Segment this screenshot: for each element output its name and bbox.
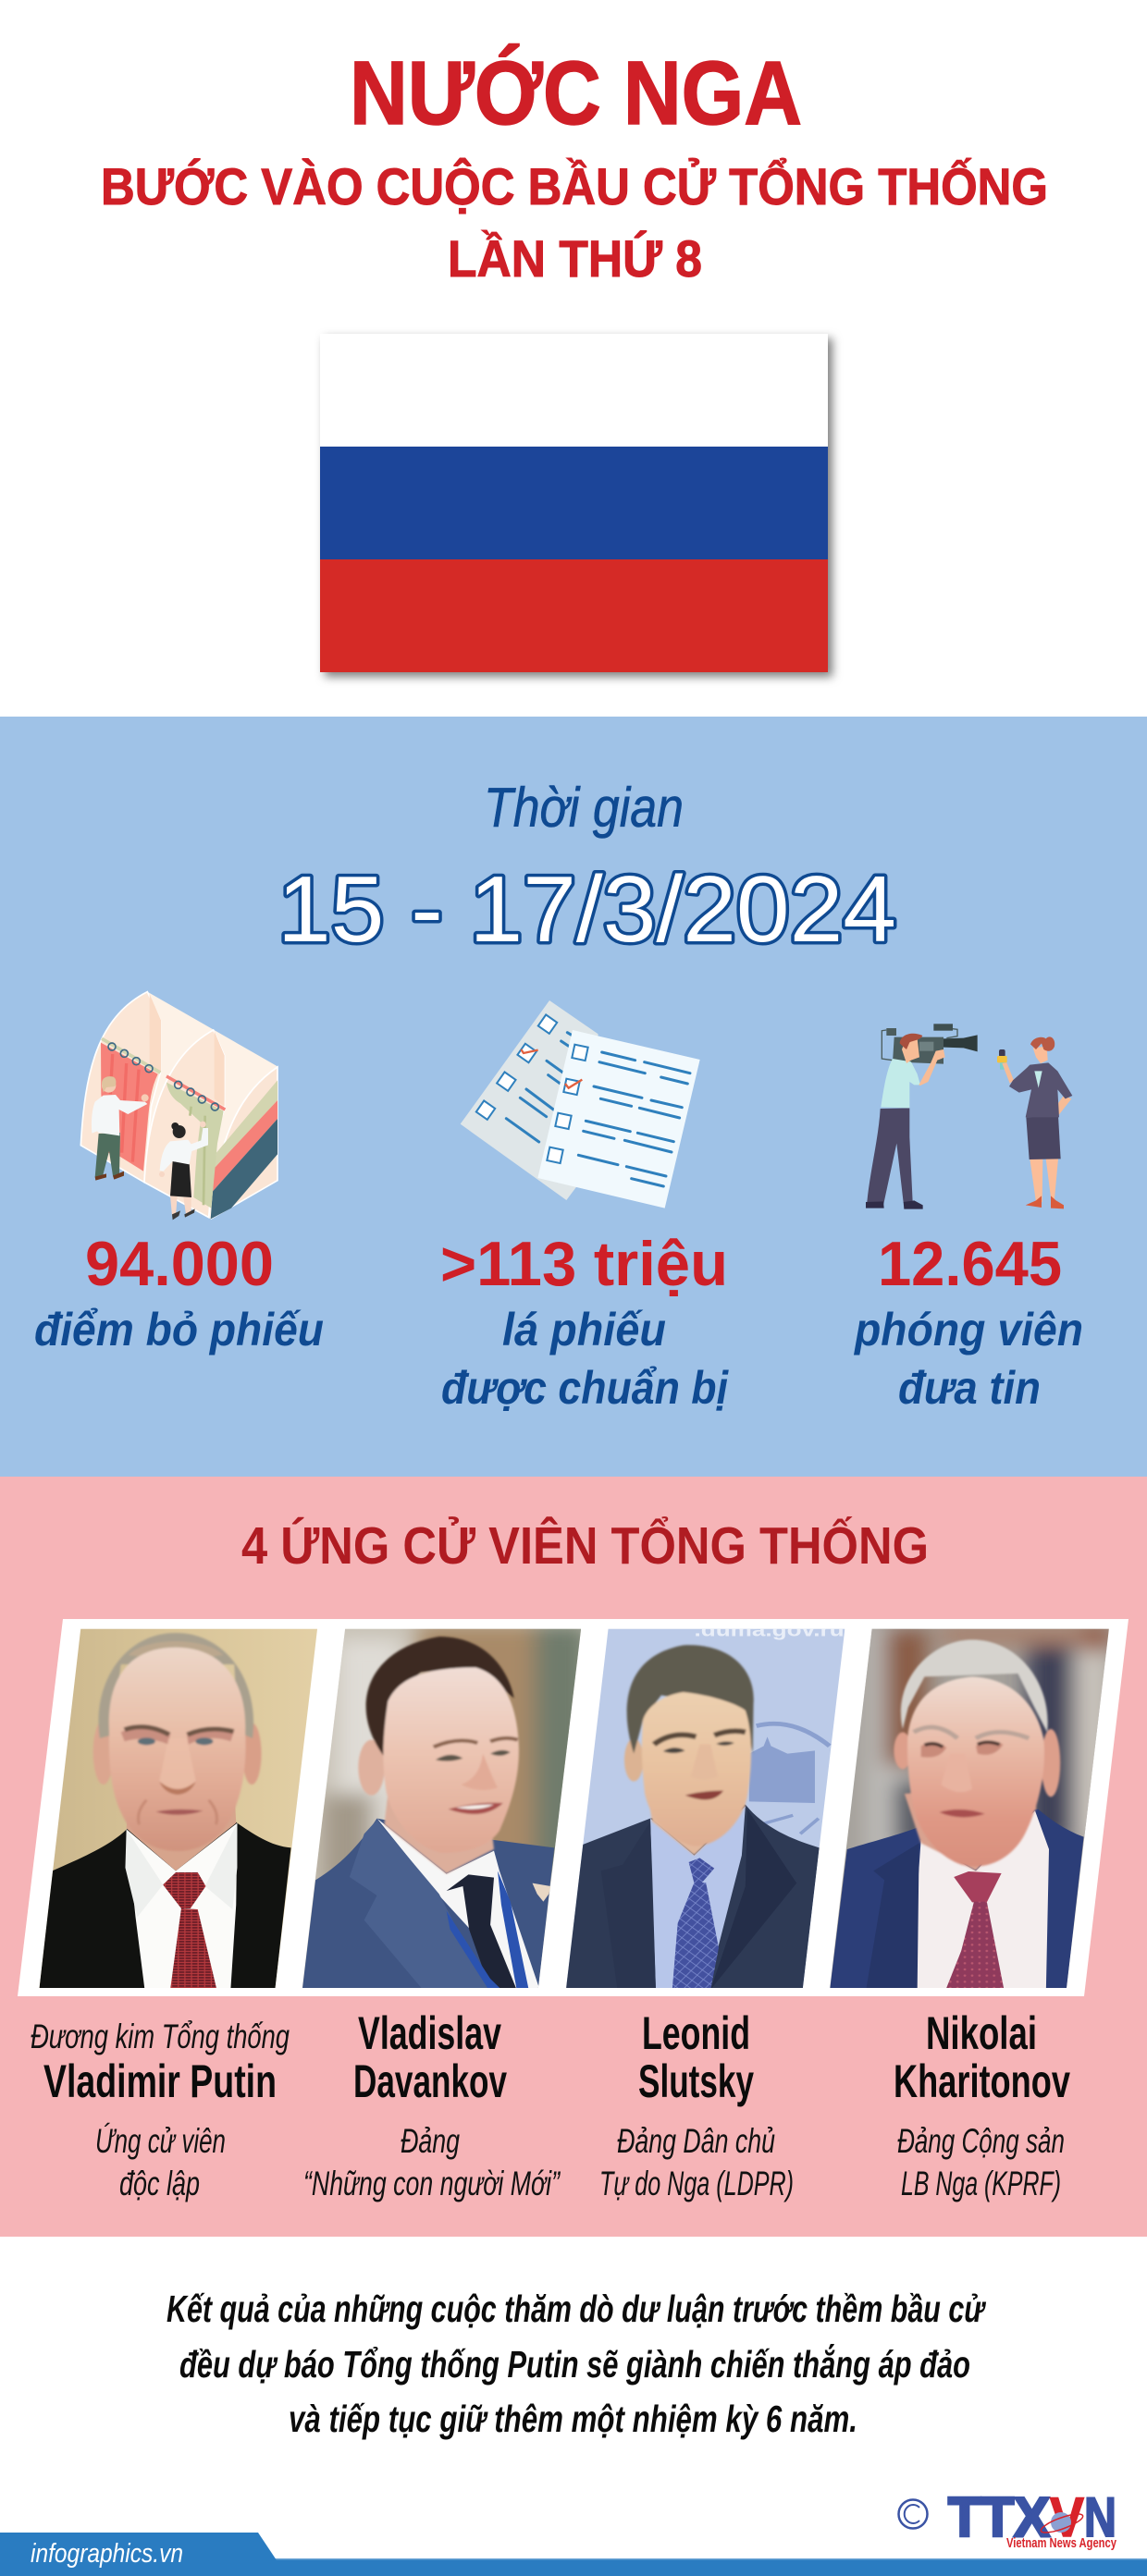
candidate: Putin xyxy=(31,2018,290,2202)
photo: Nikolai Kharitonov xyxy=(826,1625,1115,1990)
copyright symbol xyxy=(899,2500,927,2528)
first name: Leonid xyxy=(642,2007,750,2059)
label line 2: được chuẩn bị xyxy=(441,1362,729,1414)
party line 1: Đảng Dân chủ xyxy=(617,2122,775,2160)
icon: voting booths xyxy=(80,992,278,1220)
candidate: Davankov xyxy=(303,2007,561,2202)
party line 2: độc lập xyxy=(119,2165,200,2202)
candidate: Slutsky xyxy=(599,2007,794,2202)
logo: TTXVN xyxy=(899,2486,1116,2551)
party line 2: LB Nga (KPRF) xyxy=(901,2165,1061,2202)
number: 94.000 xyxy=(85,1229,274,1299)
stat: polling stations xyxy=(34,1229,324,1355)
red curtain xyxy=(101,1043,158,1171)
photo frame xyxy=(18,1619,1128,1996)
stat: reporters xyxy=(853,1229,1083,1414)
number: >113 triệu xyxy=(440,1229,728,1299)
candidate: Kharitonov xyxy=(894,2007,1070,2202)
role: Đương kim Tổng thống xyxy=(31,2018,290,2055)
footer bar xyxy=(0,2533,1147,2576)
party line 2: Tự do Nga (LDPR) xyxy=(599,2165,794,2202)
logo: TTXVN: TTX xyxy=(948,2486,1050,2548)
title: NƯỚC NGA xyxy=(350,43,802,143)
photo: Vladislav Davankov xyxy=(300,1625,589,1990)
camera xyxy=(893,1037,944,1064)
party line 2: “Những con người Mới” xyxy=(303,2165,561,2202)
party line 1: Ứng cử viên xyxy=(95,2122,226,2160)
last name: Davankov xyxy=(353,2055,507,2107)
number: 12.645 xyxy=(878,1229,1062,1299)
panel: header xyxy=(101,43,1048,672)
green curtain xyxy=(166,1083,224,1208)
party line 1: Đảng Cộng sản xyxy=(897,2122,1065,2160)
footer tab xyxy=(0,2533,277,2560)
subtitle line 2: LẦN THỨ 8 xyxy=(448,229,702,288)
icon: Russian flag xyxy=(320,334,828,672)
photo: Leonid Slutsky xyxy=(562,1618,852,1990)
label line 2: đưa tin xyxy=(898,1362,1041,1414)
logo: TTXVN: N xyxy=(1084,2486,1116,2548)
panel: candidates xyxy=(0,1477,1147,2237)
photo: Vladimir Putin xyxy=(18,1627,322,1990)
label line 1: lá phiếu xyxy=(502,1304,666,1355)
first name: Nikolai xyxy=(926,2007,1037,2059)
first name: Vladislav xyxy=(358,2007,501,2059)
last name: Kharitonov xyxy=(894,2055,1070,2107)
heading: 4 ỨNG CỬ VIÊN TỔNG THỐNG xyxy=(241,1515,929,1576)
subtitle line 1: BƯỚC VÀO CUỘC BẦU CỬ TỔNG THỐNG xyxy=(101,157,1048,215)
panel: time and key figures xyxy=(0,717,1147,1477)
icon: reporters xyxy=(866,1024,1072,1209)
label line 1: phóng viên xyxy=(853,1304,1083,1355)
stat: ballots xyxy=(440,1229,729,1414)
text block: poll conclusion xyxy=(166,2288,987,2440)
logo: TTXVN: V xyxy=(1050,2486,1084,2548)
name: Vladimir Putin xyxy=(43,2055,277,2107)
cameraman xyxy=(867,1108,913,1205)
label: time: Thời gian xyxy=(484,777,684,839)
reporter xyxy=(1002,1062,1014,1084)
woman xyxy=(170,1196,191,1216)
label: điểm bỏ phiếu xyxy=(34,1304,324,1355)
logo: TTXVN: Vietnam News Agency xyxy=(1006,2536,1116,2551)
source: infographics.vn xyxy=(31,2539,183,2569)
party line 1: Đảng xyxy=(401,2122,460,2160)
icon: ballots xyxy=(461,1000,700,1208)
man xyxy=(95,1133,120,1177)
text block: poll conclusion: và tiếp tục giữ thêm một nhiệm kỳ 6 năm. xyxy=(289,2398,857,2440)
backdrop text: .duma.gov.ru xyxy=(694,1618,845,1640)
last name: Slutsky xyxy=(638,2055,754,2107)
microphone xyxy=(999,1049,1005,1057)
date: 15 - 17/3/2024 xyxy=(278,858,896,962)
